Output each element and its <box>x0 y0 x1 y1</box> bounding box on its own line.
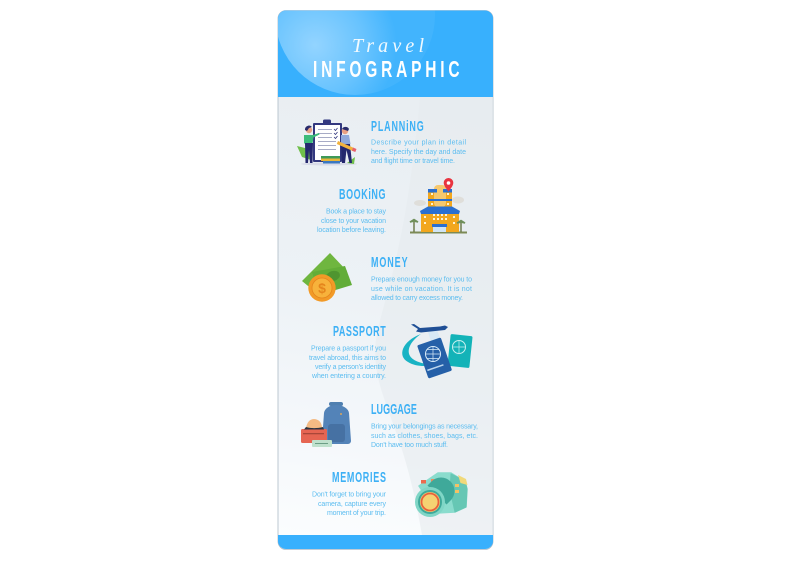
heading: booking: BOOKiNG <box>339 186 386 203</box>
text: memories description: Don't forget to bring your <box>312 492 387 498</box>
header band <box>278 10 493 97</box>
section: booking <box>317 178 467 234</box>
text: memories description <box>312 492 387 517</box>
text: money description <box>371 276 472 302</box>
section: money <box>302 253 472 302</box>
icon: hotel with location pin <box>410 178 467 234</box>
text: passport description <box>309 346 386 380</box>
footer band <box>278 535 493 549</box>
infographic card <box>275 0 493 550</box>
icon: banknotes and coin: $ <box>318 280 326 296</box>
text: memories description: moment of your trip. <box>327 510 386 517</box>
heading: planning: PLANNiNG <box>371 118 424 135</box>
text: luggage description: Don't have too much stuff. <box>371 442 448 449</box>
heading: luggage: LUGGAGE <box>371 401 417 418</box>
icon: camera <box>415 473 468 517</box>
header light circle <box>278 10 435 95</box>
section: luggage <box>301 401 478 449</box>
text: luggage description: Bring your belongings as necessary, <box>371 424 478 430</box>
icon: planning clipboard and people <box>297 120 357 166</box>
text: luggage description <box>371 424 478 449</box>
text: booking description: Book a place to stay <box>326 208 386 216</box>
text: passport description: travel abroad, this aims to <box>309 355 386 362</box>
text: luggage description: such as clothes, shoes, bags, etc. <box>371 433 478 440</box>
icon: luggage, backpack and hat <box>301 402 351 447</box>
title <box>313 35 460 83</box>
text: planning description: and flight time or travel time. <box>371 158 455 165</box>
title main line: INFOGRAPHIC <box>313 57 460 83</box>
text: passport description: Prepare a passport if you <box>311 346 386 352</box>
heading: memories: MEMORIES <box>332 469 386 486</box>
section: planning <box>297 118 466 166</box>
title script line: Travel <box>352 35 424 57</box>
text: planning description: here. Specify the day and date <box>371 149 466 156</box>
icon: banknotes and coin <box>302 253 352 302</box>
section: passport <box>309 323 473 380</box>
text: memories description: camera, capture every <box>318 501 386 508</box>
text: money description: allowed to carry excess money. <box>371 295 463 302</box>
section: memories <box>312 469 468 517</box>
text: booking description <box>317 208 386 234</box>
heading: passport: PASSPORT <box>333 323 386 340</box>
background shading <box>393 97 493 535</box>
text: passport description: when entering a country. <box>311 373 386 380</box>
text: money description: Prepare enough money for you to <box>371 276 472 284</box>
icon: passports and airplane <box>402 324 473 379</box>
heading: money: MONEY <box>371 254 408 271</box>
text: planning description <box>371 140 466 165</box>
text: passport description: verify a person's identity <box>315 364 386 371</box>
text: booking description: close to your vacation <box>321 218 386 225</box>
text: money description: use while on vacation. It is not <box>371 286 472 293</box>
text: planning description: Describe your plan in detail <box>371 140 466 146</box>
text: booking description: location before leaving. <box>317 227 386 234</box>
